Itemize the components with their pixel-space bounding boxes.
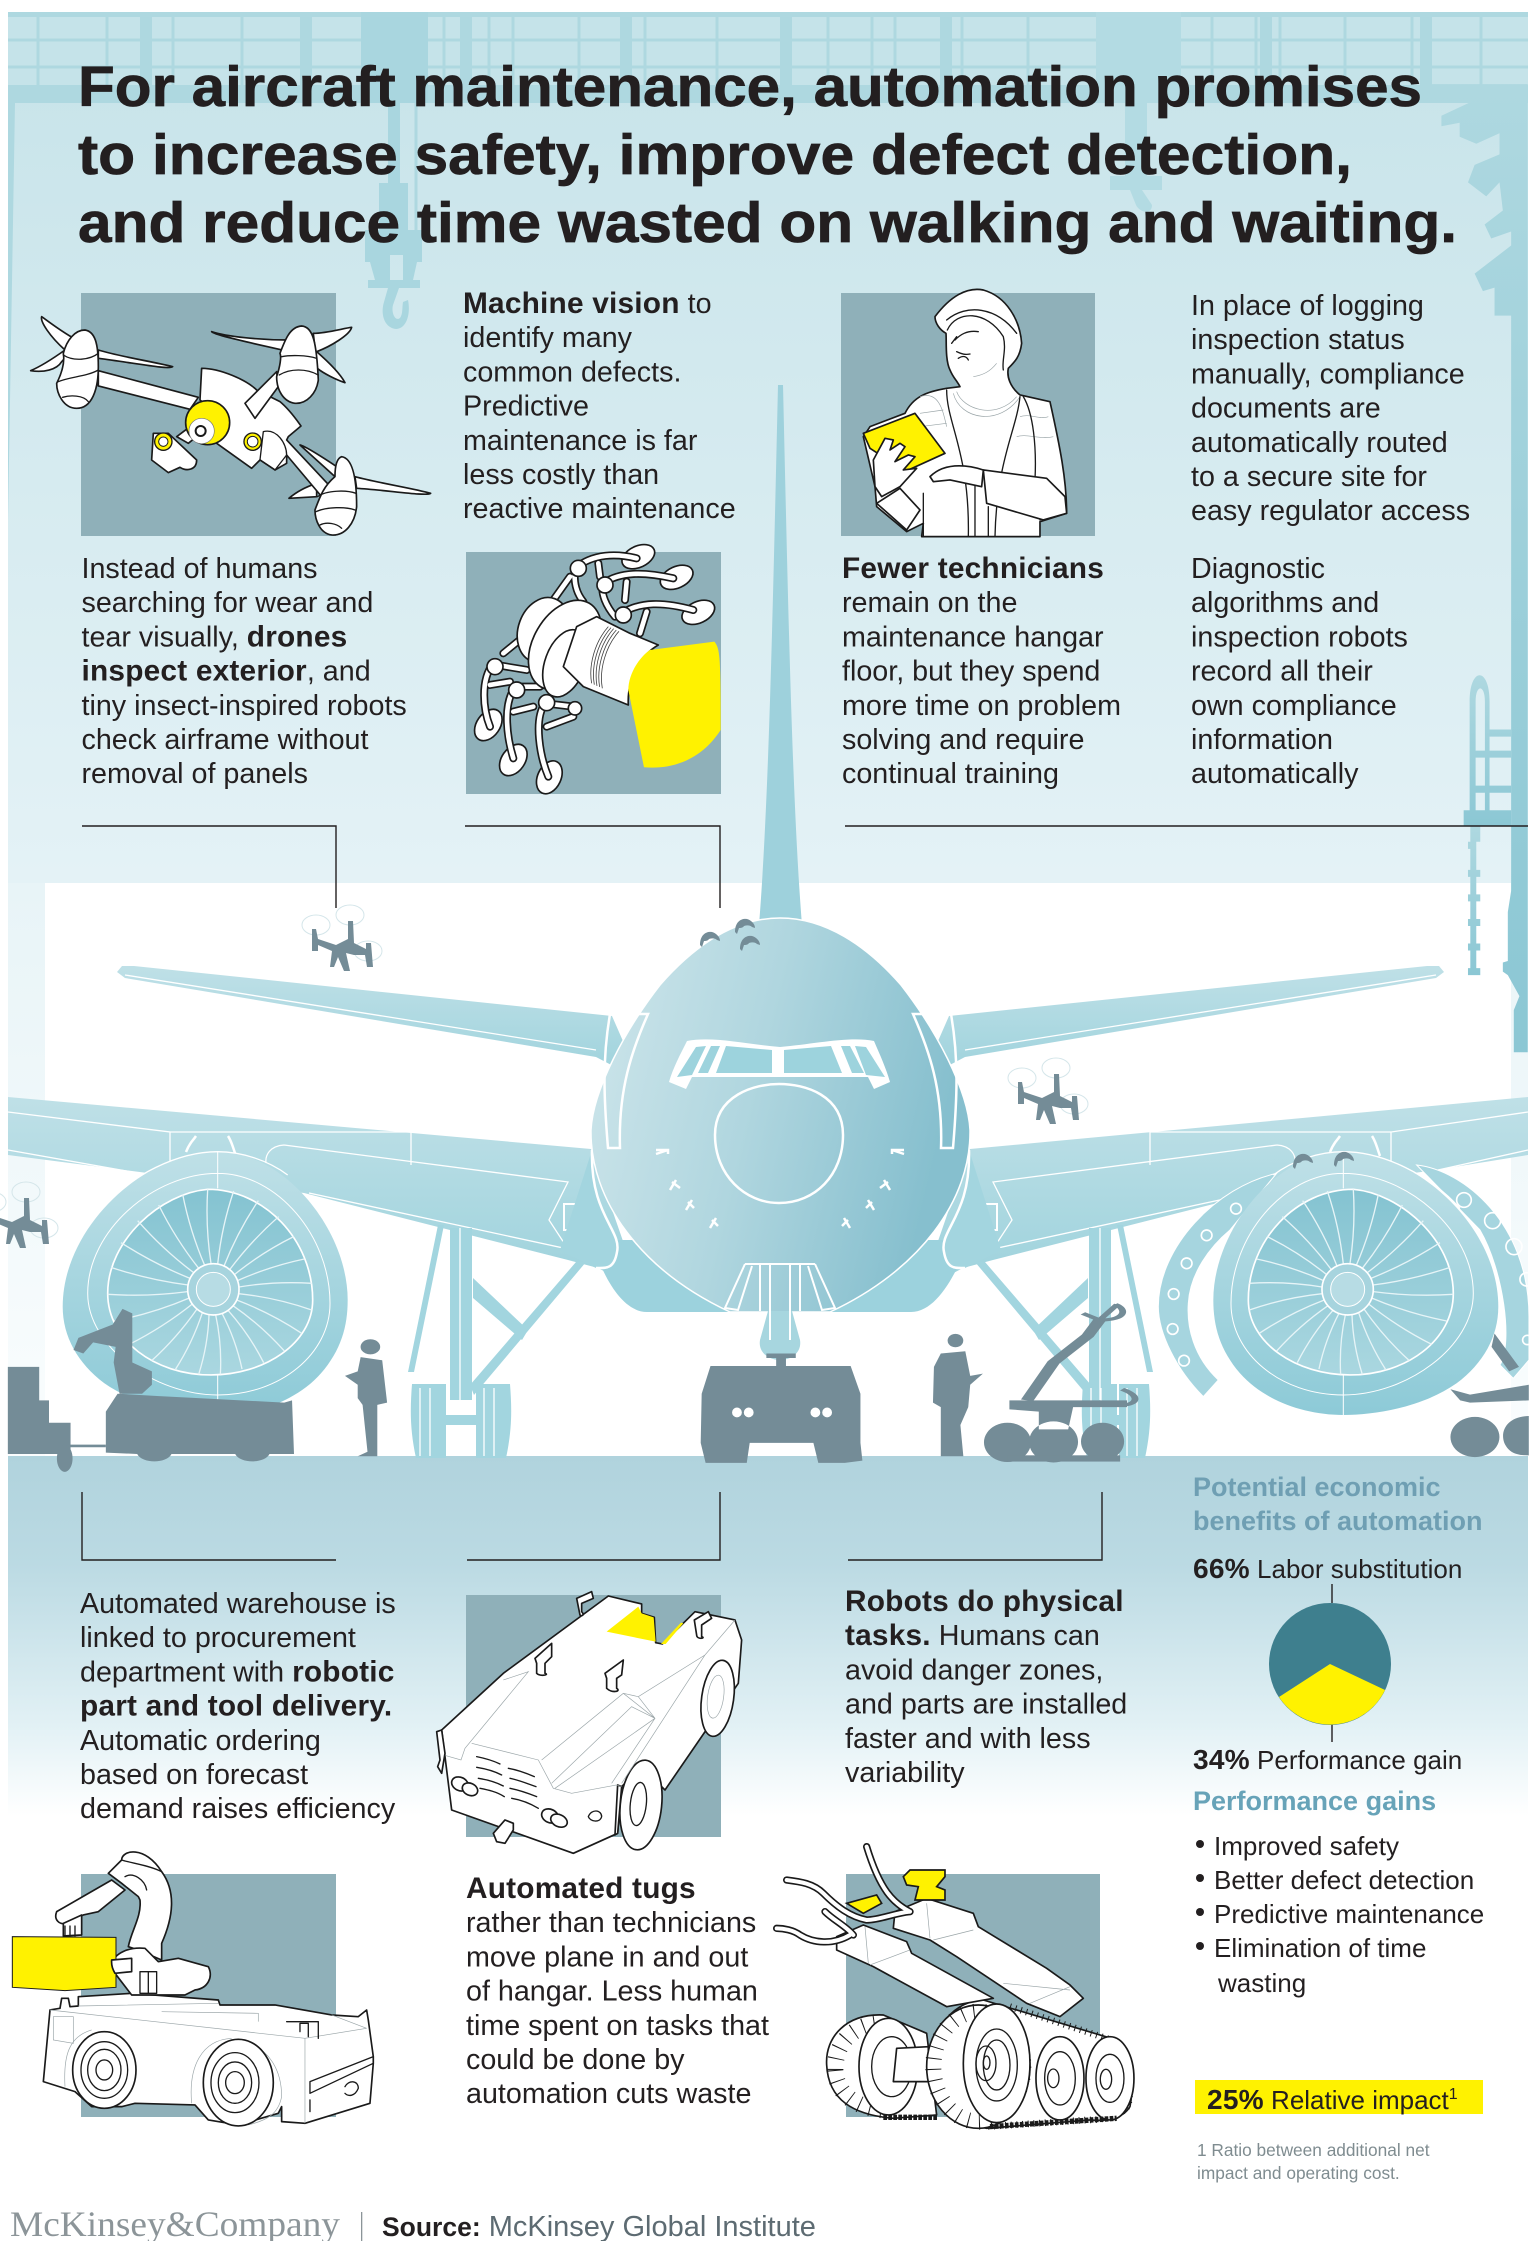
text: diagnostic algorithms: automatically xyxy=(1191,758,1359,790)
text: machine vision: less costly than xyxy=(463,459,659,491)
text: fewer technicians: floor, but they spend xyxy=(842,656,1100,688)
text: diagnostic algorithms: Diagnostic xyxy=(1191,553,1325,585)
inspection bugs on plane xyxy=(700,919,1354,1169)
text: robots physical tasks: variability xyxy=(845,1757,965,1789)
text: robots physical tasks: faster and with less xyxy=(845,1723,1091,1755)
warehouse robot silhouette xyxy=(57,1309,294,1472)
label: performance gain: 34% Performance gain xyxy=(1193,1744,1462,1775)
text: warehouse: Automatic ordering xyxy=(80,1725,321,1757)
cockpit windows xyxy=(669,1039,890,1089)
text: automated tugs: rather than technicians xyxy=(466,1907,756,1939)
list: performance gains xyxy=(1196,1831,1484,1998)
text: drones: tear visually, drones xyxy=(82,620,347,654)
text: fewer technicians: maintenance hangar xyxy=(842,622,1104,654)
text: compliance logging: inspection status xyxy=(1191,324,1405,356)
list: performance gains: Better defect detection xyxy=(1214,1865,1474,1895)
text: fewer technicians: continual training xyxy=(842,758,1059,790)
text: diagnostic algorithms: record all their xyxy=(1191,656,1373,688)
text: compliance logging: automatically routed xyxy=(1191,427,1448,459)
text: diagnostic algorithms: algorithms and xyxy=(1191,587,1379,619)
text: warehouse: demand raises efficiency xyxy=(80,1793,396,1825)
list: performance gains: Predictive maintenance xyxy=(1214,1899,1484,1929)
label: labor substitution: 66% Labor substitution xyxy=(1193,1553,1462,1584)
text: compliance logging: In place of logging xyxy=(1191,290,1424,322)
panel: tracked robot illustration xyxy=(777,1847,1134,2128)
callout lines xyxy=(82,826,1528,1560)
panel: automated tug illustration xyxy=(437,1592,742,1853)
wing-root vents xyxy=(564,1204,997,1230)
text: diagnostic algorithms: own compliance xyxy=(1191,690,1397,722)
right engine xyxy=(1213,1152,1498,1415)
airplane xyxy=(8,385,1533,1458)
callout: relative impact: 25% Relative impact xyxy=(1207,2084,1449,2115)
title xyxy=(78,55,1457,255)
text: machine vision: to xyxy=(680,288,712,320)
text: automated tugs: time spent on tasks that xyxy=(466,2010,769,2042)
text: diagnostic algorithms: inspection robots xyxy=(1191,622,1408,654)
list: performance gains: Elimination of time xyxy=(1214,1933,1426,1963)
crawler robot silhouette xyxy=(984,1304,1135,1462)
title: and reduce time wasted on walking and waiting. xyxy=(78,191,1457,255)
panel: drone illustration xyxy=(31,293,431,536)
text: robots physical tasks: tasks. Humans can xyxy=(845,1619,1100,1652)
right structure: gantry and ladder xyxy=(1422,84,1528,1052)
text: compliance logging: to a secure site for xyxy=(1191,461,1427,493)
footnote: impact and operating cost. xyxy=(1197,2163,1400,2183)
text: automated tugs: of hangar. Less human xyxy=(466,1976,758,2008)
text: drones: check airframe without xyxy=(82,724,369,756)
text: drones: removal of panels xyxy=(82,758,308,790)
text: warehouse: linked to procurement xyxy=(80,1622,356,1654)
text: fewer technicians: solving and require xyxy=(842,724,1084,756)
text: fewer technicians: remain on the xyxy=(842,587,1017,619)
pie chart xyxy=(1269,1584,1391,1742)
nose sensor marks xyxy=(656,1150,904,1228)
dark silhouettes on hangar floor xyxy=(8,1304,1529,1472)
left technician xyxy=(345,1339,387,1456)
heading: potential economic benefits: Potential economic xyxy=(1193,1472,1441,1502)
main wings xyxy=(8,1097,1528,1290)
footer divider xyxy=(361,2212,362,2241)
text: compliance logging: manually, compliance xyxy=(1191,358,1465,390)
small drones xyxy=(0,905,1088,1248)
right engine cowl doors xyxy=(1158,1165,1533,1397)
title: For aircraft maintenance, automation promises xyxy=(78,55,1422,119)
tug silhouette xyxy=(701,1354,862,1463)
horizontal stabilizers xyxy=(117,966,1444,1080)
text: warehouse: department with robotic xyxy=(80,1656,395,1688)
panel: machine vision robot illustration xyxy=(466,540,721,798)
list: performance gains: wasting xyxy=(1217,1968,1306,1998)
fuselage nose xyxy=(591,918,970,1312)
heading: performance gains: Performance gains xyxy=(1193,1786,1436,1816)
text: drones: Instead of humans xyxy=(82,553,318,585)
text: drones: tiny insect-inspired robots xyxy=(82,690,407,722)
text: warehouse: Automated warehouse is xyxy=(80,1588,396,1620)
text: machine vision: common defects. xyxy=(463,356,681,388)
text: automated tugs: move plane in and out xyxy=(466,1942,748,1974)
heading: potential economic benefits: benefits of automation xyxy=(1193,1506,1482,1536)
text: automated tugs: Automated tugs xyxy=(466,1872,696,1905)
panel: warehouse robot illustration xyxy=(12,1852,373,2126)
text: machine vision: reactive maintenance xyxy=(463,493,736,525)
panel: technician illustration xyxy=(841,289,1095,537)
text: machine vision: identify many xyxy=(463,322,633,354)
nose radome outline xyxy=(715,1084,843,1203)
text: warehouse: part and tool delivery. xyxy=(80,1690,392,1722)
text: robots physical tasks: avoid danger zones, xyxy=(845,1654,1103,1686)
text: machine vision: Predictive xyxy=(463,390,589,422)
text: compliance logging: easy regulator access xyxy=(1191,495,1470,527)
text: machine vision: maintenance is far xyxy=(463,425,698,457)
footnote: 1 Ratio between additional net xyxy=(1197,2140,1430,2160)
wing root fillets xyxy=(560,1150,1001,1268)
crane right xyxy=(1096,12,1181,212)
side door stripes xyxy=(604,1014,956,1148)
text: drones: searching for wear and xyxy=(82,587,373,619)
fuselage belly xyxy=(592,1240,969,1312)
callout: relative impact: 1 xyxy=(1449,2086,1458,2103)
right technician xyxy=(933,1334,983,1456)
nose landing gear xyxy=(725,1264,835,1360)
left engine xyxy=(63,1152,348,1415)
text: machine vision: Machine vision xyxy=(463,287,680,320)
text: drones: inspect exterior, and xyxy=(82,654,371,688)
text: warehouse: based on forecast xyxy=(80,1759,308,1791)
background: hangar xyxy=(8,12,1528,1816)
text: automated tugs: automation cuts waste xyxy=(466,2078,751,2110)
text: fewer technicians: Fewer technicians xyxy=(842,552,1104,585)
text: fewer technicians: more time on problem xyxy=(842,690,1121,722)
text: automated tugs: could be done by xyxy=(466,2044,685,2076)
parts rack silhouette xyxy=(8,1367,106,1454)
text: diagnostic algorithms: information xyxy=(1191,724,1333,756)
text: robots physical tasks: Robots do physical xyxy=(845,1585,1124,1618)
title: to increase safety, improve defect detection, xyxy=(78,123,1352,187)
text: robots physical tasks: and parts are installed xyxy=(845,1688,1127,1720)
text: compliance logging: documents are xyxy=(1191,392,1381,424)
tail fin xyxy=(759,385,802,925)
list: performance gains: Improved safety xyxy=(1214,1831,1399,1861)
crane left xyxy=(361,12,428,329)
far right crawler silhouette xyxy=(1450,1333,1529,1457)
main landing gear xyxy=(408,1225,1153,1458)
